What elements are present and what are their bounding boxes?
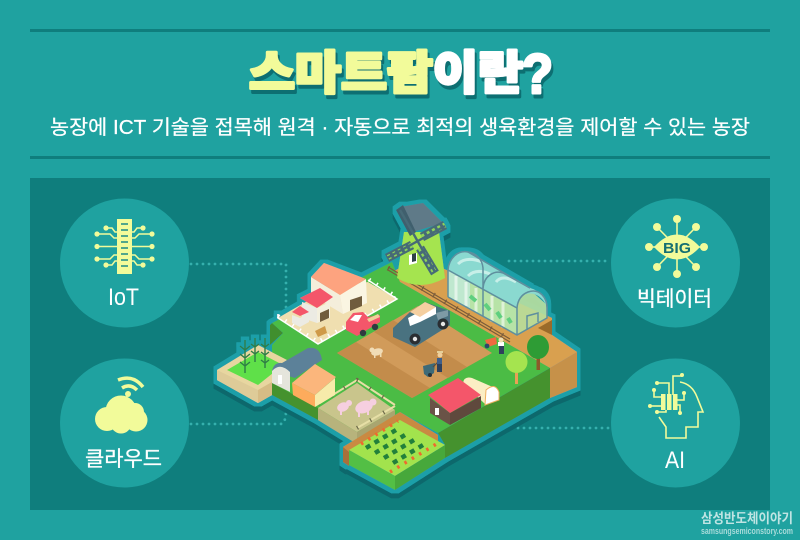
greenhouse bbox=[448, 252, 547, 335]
cream storage hut bbox=[463, 378, 499, 405]
pigs bbox=[336, 398, 376, 417]
title: ? bbox=[524, 46, 555, 109]
vegetable field bbox=[343, 412, 445, 490]
circle: cloud bbox=[60, 358, 189, 488]
red truck bbox=[346, 312, 380, 336]
fence bbox=[388, 267, 510, 342]
main green ground bbox=[272, 262, 550, 437]
title: 스마트팜 bbox=[251, 51, 435, 103]
illustration: isometric smart farm bbox=[217, 203, 577, 490]
circle: big data bbox=[611, 198, 740, 328]
title bbox=[249, 42, 555, 109]
label: IoT: IoT bbox=[108, 284, 139, 311]
pig in field bbox=[370, 347, 384, 358]
windmill bbox=[387, 203, 445, 285]
main farmhouse bbox=[311, 263, 367, 314]
dotted connector lines bbox=[191, 261, 610, 428]
icon: IoT chip bbox=[94, 219, 155, 274]
title: 이란 bbox=[435, 51, 525, 103]
farm yard bbox=[278, 263, 397, 344]
farmer with wheelbarrow bbox=[423, 351, 443, 377]
trees bbox=[506, 335, 549, 384]
blue jeep bbox=[393, 302, 450, 347]
watermark bbox=[701, 511, 793, 536]
watermark: 삼성반도체이야기 bbox=[701, 511, 793, 526]
icon: BIG data eye: BIG bbox=[663, 240, 691, 257]
pig pen bbox=[318, 380, 395, 444]
plant box bbox=[217, 338, 287, 403]
label: AI: AI bbox=[665, 447, 685, 474]
icon: AI head circuit bbox=[648, 373, 703, 438]
circle: AI bbox=[611, 358, 740, 488]
title: 스마트팜 bbox=[249, 47, 433, 99]
brown field bbox=[337, 306, 492, 398]
circle: IoT bbox=[60, 198, 189, 328]
red-roofed shed bbox=[428, 378, 481, 425]
title: ? bbox=[522, 42, 553, 105]
gardener with red cart bbox=[485, 337, 504, 354]
small wing bbox=[292, 306, 309, 327]
barn with orange shed bbox=[272, 348, 336, 407]
back orange ground bbox=[388, 258, 577, 368]
subtitle: 농장에 ICT 기술을 접목해 원격 · 자동으로 최적의 생육환경을 제어할 수 있는 농장 bbox=[50, 116, 750, 139]
label: cloud: 클라우드 bbox=[85, 448, 162, 471]
label: big data: 빅테이터 bbox=[637, 288, 712, 311]
red roof wing bbox=[300, 288, 333, 323]
panel: smart farm technologies bbox=[30, 178, 770, 510]
title: 이란 bbox=[433, 47, 523, 99]
cardboard box bbox=[315, 326, 327, 337]
icon: cloud with wifi bbox=[95, 378, 148, 434]
